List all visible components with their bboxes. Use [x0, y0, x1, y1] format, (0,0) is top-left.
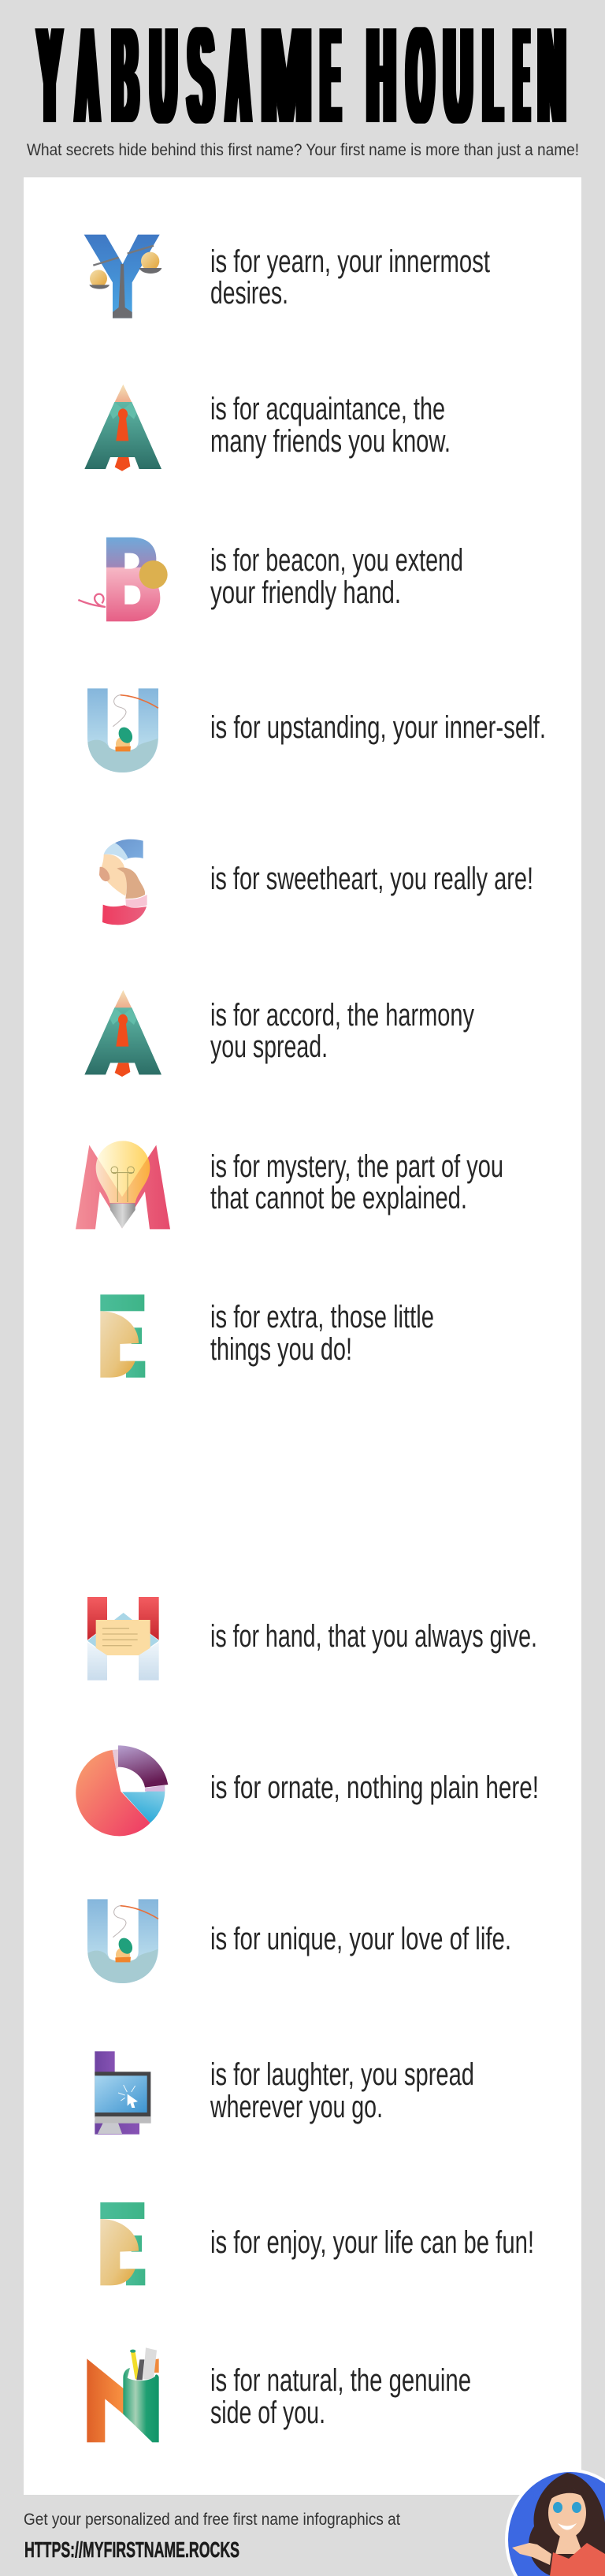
footer text: Get your personalized and free first name infographics at	[24, 2511, 400, 2529]
text: M	[210, 1149, 503, 1215]
text: A second	[210, 998, 474, 1064]
text: A second: is for accord, the harmony	[210, 998, 474, 1033]
title: U	[444, 0, 472, 151]
icon: letter Y scales	[84, 235, 161, 318]
title: E	[321, 0, 340, 151]
text: E	[210, 1300, 434, 1367]
text: A: is for acquaintance, the	[210, 392, 445, 426]
title: Y	[39, 0, 61, 151]
text: B: your friendly hand.	[210, 575, 401, 610]
text: A: many friends you know.	[210, 424, 451, 459]
text: L: is for laughter, you spread	[210, 2057, 474, 2092]
icon: letter E moon repeat	[100, 2202, 145, 2285]
footer url: HTTPS://MYFIRSTNAME.ROCKS	[24, 2537, 239, 2562]
icon: letter O pie chart	[76, 1745, 168, 1836]
icon: letter B piggy bank	[78, 538, 168, 621]
text: M: that cannot be explained.	[210, 1181, 467, 1215]
text: A	[210, 392, 451, 459]
icon: letter L computer	[95, 2051, 151, 2135]
icon: letter U fishing	[87, 688, 158, 772]
text: N	[210, 2363, 471, 2430]
icon: letter A tie repeat	[84, 990, 161, 1077]
title: M	[261, 0, 312, 151]
title: U	[150, 0, 176, 151]
icon: letter E moon	[100, 1294, 145, 1378]
text: N: side of you.	[210, 2395, 325, 2430]
text: Y	[210, 244, 490, 311]
icon: letter A tie	[84, 385, 161, 471]
text: E: is for extra, those little	[210, 1300, 434, 1335]
text: Y: is for yearn, your innermost	[210, 244, 490, 279]
text: L	[210, 2057, 474, 2124]
text: L: wherever you go.	[210, 2090, 383, 2124]
title: N	[539, 0, 565, 151]
icon: letter H envelope	[87, 1597, 159, 1681]
avatar	[507, 2470, 605, 2576]
title: O	[407, 0, 433, 151]
text: Y: desires.	[210, 276, 288, 311]
title: B	[113, 0, 138, 151]
icon: letter U fishing repeat	[87, 1899, 158, 1983]
title: A	[227, 0, 250, 151]
icon: letter S handshake	[99, 839, 147, 925]
text: M: is for mystery, the part of you	[210, 1149, 503, 1184]
icon: letter M light bulb	[76, 1141, 170, 1229]
text: B: is for beacon, you extend	[210, 543, 463, 578]
title: A	[76, 0, 98, 151]
title: E	[515, 0, 528, 152]
text: N: is for natural, the genuine	[210, 2363, 471, 2398]
text: E: things you do!	[210, 1332, 352, 1367]
text: B	[210, 543, 463, 610]
title: L	[484, 0, 502, 151]
text: A second: you spread.	[210, 1029, 328, 1064]
title: S	[188, 0, 213, 151]
title	[39, 0, 565, 152]
title: H	[368, 0, 395, 151]
icon: letter N pencil cup	[87, 2347, 159, 2442]
